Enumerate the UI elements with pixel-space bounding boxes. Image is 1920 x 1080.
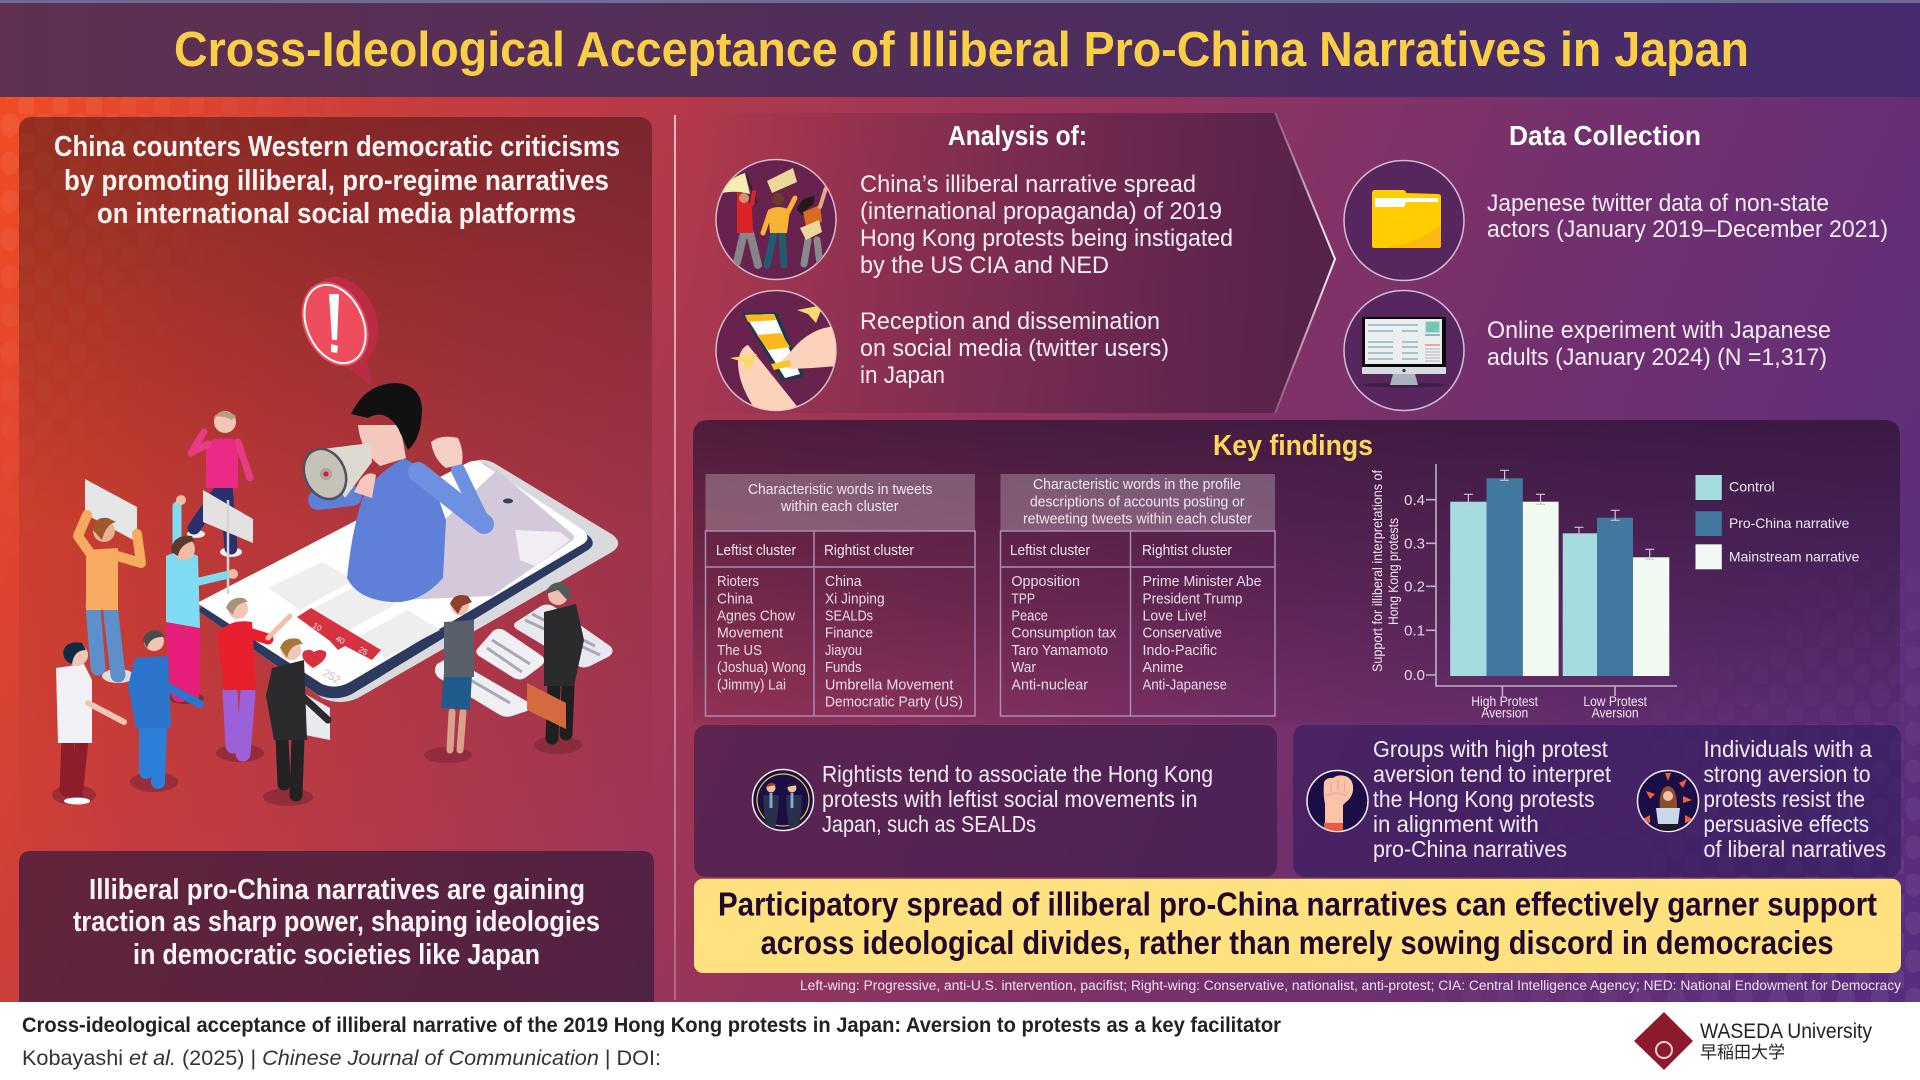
text: analysis item 1: Hong Kong protests being instigated <box>860 225 1233 252</box>
text: analysis item 2: on social media (twitter users) <box>860 335 1169 362</box>
legend: Pro-China narrative <box>1729 515 1850 531</box>
text: analysis item 2: Reception and dissemination <box>860 308 1160 335</box>
callout: main conclusion <box>694 879 1901 973</box>
chart bars <box>1450 478 1669 676</box>
text: rightists: Japan, such as SEALDs <box>822 811 1036 837</box>
footer: citation <box>0 1002 1920 1080</box>
text: individuals: persuasive effects <box>1704 811 1869 837</box>
text: twitter data: actors (January 2019–December 2021) <box>1487 216 1888 243</box>
table: tweet words: Finance <box>825 626 873 642</box>
person: businessman with briefcase <box>527 582 584 754</box>
text: analysis item 1: (international propaganda) of 2019 <box>860 198 1222 225</box>
table: profile words: Prime Minister Abe <box>1142 574 1262 590</box>
table: profile words: Consumption tax <box>1011 626 1117 642</box>
table: profile words: Indo-Pacific <box>1142 643 1217 659</box>
logo: Waseda University: WASEDA University <box>1700 1020 1872 1043</box>
table: profile words: Anti-Japanese <box>1142 678 1227 694</box>
heading: key findings: Key findings <box>1213 430 1373 462</box>
person: white shirt <box>52 642 124 805</box>
table: profile words: descriptions of accounts posting or <box>1030 495 1245 511</box>
y axis labels: 0.3 <box>1404 536 1425 552</box>
table: profile words: TPP <box>1011 591 1035 607</box>
text: groups: aversion tend to interpret <box>1373 761 1611 787</box>
heading: left panel statement: China counters Western democratic criticisms <box>54 131 620 163</box>
panel: bottom-left conclusion: Illiberal pro-China narratives are gaining <box>89 874 585 906</box>
text: groups: pro-China narratives <box>1373 836 1567 862</box>
table: profile words: Anti-nuclear <box>1011 678 1088 694</box>
panel: bottom-left conclusion: in democratic societies like Japan <box>133 939 540 971</box>
smartphone <box>197 460 618 702</box>
protester: orange shirt with sign <box>78 479 141 683</box>
y axis labels: 0.2 <box>1404 578 1425 596</box>
panel: left context <box>19 117 652 857</box>
alert speech bubble <box>289 266 392 386</box>
y axis labels <box>1369 470 1425 684</box>
text: analysis item 2 <box>860 308 1169 389</box>
notification badge: 40 <box>334 634 347 646</box>
text: individuals: of liberal narratives <box>1704 836 1886 862</box>
logo: Waseda University <box>1634 1012 1872 1070</box>
table: profile words: Taro Yamamoto <box>1011 643 1108 659</box>
panel: bottom-left conclusion: traction as sharp power, shaping ideologies <box>73 906 600 938</box>
x axis labels: Low Protest <box>1583 693 1647 709</box>
heading: data collection: Data Collection <box>1509 120 1701 151</box>
table: tweet words: Characteristic words in tweets <box>748 482 932 498</box>
footer: citation: Cross-ideological acceptance of illiberal narrative of the 2019 Hong Kong protests in Japan: Aversion to protests as a key facilitator <box>22 1014 1281 1037</box>
protester: cyan top <box>166 495 238 704</box>
table: profile words: Characteristic words in the profile <box>1033 477 1241 493</box>
text: analysis item 2: in Japan <box>860 362 945 389</box>
text: analysis item 1 <box>860 171 1233 279</box>
x axis labels: Aversion <box>1481 705 1528 721</box>
y axis labels: 0.1 <box>1404 622 1425 640</box>
text: online experiment: adults (January 2024) (N =1,317) <box>1487 344 1827 371</box>
table: tweet words: within each cluster <box>780 499 899 515</box>
text: groups: in alignment with <box>1373 811 1539 837</box>
text: analysis item 1: by the US CIA and NED <box>860 252 1109 279</box>
y axis labels: Hong Kong protests <box>1385 518 1401 625</box>
text: individuals: strong aversion to <box>1704 761 1870 787</box>
icon: two men <box>752 770 814 830</box>
text: rightists: protests with leftist social movements in <box>822 786 1198 812</box>
table: tweet words: The US <box>717 643 762 659</box>
table: profile words: War <box>1011 660 1036 676</box>
text: online experiment <box>1487 317 1831 371</box>
text: groups <box>1373 736 1611 862</box>
illustration: crowd around smartphone with megaphone speaker <box>52 266 618 806</box>
table: tweet words: Democratic Party (US) <box>825 695 963 711</box>
table: tweet words: China <box>717 591 754 607</box>
text: analysis item 1: China’s illiberal narrative spread <box>860 171 1196 198</box>
table: profile words: Leftist cluster <box>1010 543 1090 559</box>
table: profile words: Peace <box>1011 609 1048 625</box>
icon: woman with arrows <box>1638 770 1698 832</box>
notification badge: 25 <box>357 645 370 657</box>
table: profile words: Anime <box>1142 660 1183 676</box>
text: groups: Groups with high protest <box>1373 736 1608 762</box>
heading: left panel statement <box>54 131 620 230</box>
text: individuals: Individuals with a <box>1704 736 1873 762</box>
table: profile words: Opposition <box>1011 574 1080 590</box>
table: tweet words: Agnes Chow <box>717 609 795 625</box>
main figure with megaphone <box>296 383 484 602</box>
table: tweet words: Rightist cluster <box>824 543 914 559</box>
text: groups: the Hong Kong protests <box>1373 786 1594 812</box>
table: profile words: President Trump <box>1142 591 1242 607</box>
notification badge: 252 <box>320 667 342 687</box>
table: tweet words: (Joshua) Wong <box>717 660 806 676</box>
icon: monitor <box>1344 290 1464 410</box>
table: tweet words: Rioters <box>717 574 759 590</box>
title: Cross-Ideological Acceptance of Illiberal Pro-China Narratives in Japan <box>174 23 1749 77</box>
protester: pink top <box>187 411 253 594</box>
table: profile words <box>1000 474 1275 716</box>
icon: raised fist <box>1307 770 1368 832</box>
y axis labels: 0.0 <box>1404 667 1425 684</box>
text: twitter data <box>1487 190 1888 243</box>
legend: Mainstream narrative <box>1729 549 1860 565</box>
panel: key findings <box>693 420 1900 724</box>
x axis labels: High Protest <box>1471 693 1538 709</box>
person: black suit with paper <box>263 638 330 806</box>
panel: bottom-left conclusion <box>19 851 654 1002</box>
notification badge: 10 <box>311 621 324 633</box>
legend <box>1696 475 1860 569</box>
logo: Waseda University: 早稲田大学 <box>1700 1043 1785 1062</box>
heading: analysis: Analysis of: <box>948 120 1087 151</box>
panel: protest aversion findings <box>1293 725 1901 877</box>
table: tweet words: SEALDs <box>825 609 873 625</box>
table: tweet words <box>706 474 975 716</box>
table: profile words: retweeting tweets within each cluster <box>1023 512 1252 528</box>
heading: left panel statement: by promoting illiberal, pro-regime narratives <box>64 165 609 197</box>
panel: data collection <box>1344 120 1888 410</box>
text: individuals: protests resist the <box>1704 786 1865 812</box>
table: tweet words: Umbrella Movement <box>825 678 953 694</box>
notification badge <box>297 608 381 687</box>
table: tweet words: Leftist cluster <box>716 543 796 559</box>
text: rightists: Rightists tend to associate the Hong Kong <box>822 761 1213 787</box>
bar chart <box>1369 464 1677 721</box>
panel: rightists finding <box>694 725 1277 877</box>
icon: folder <box>1344 160 1464 280</box>
table: tweet words: (Jimmy) Lai <box>717 678 786 694</box>
table: tweet words: China <box>825 574 862 590</box>
text: twitter data: Japenese twitter data of non-state <box>1487 190 1829 217</box>
y axis labels: Support for illiberal interpretations of <box>1369 470 1385 672</box>
table: tweet words: Movement <box>717 626 783 642</box>
title banner <box>0 3 1920 97</box>
person: woman in skirt <box>424 595 474 763</box>
panel: analysis chevron <box>690 113 1335 413</box>
table: profile words: Conservative <box>1142 626 1222 642</box>
text: rightists <box>822 761 1213 837</box>
chat cards <box>435 604 613 717</box>
table: profile words: Love Live! <box>1142 609 1207 625</box>
legend: Control <box>1729 479 1775 495</box>
text: individuals <box>1704 736 1886 862</box>
icon: protesters <box>716 160 836 280</box>
heading: left panel statement: on international social media platforms <box>97 198 576 230</box>
table: tweet words: Funds <box>825 660 862 676</box>
icon: hand holding phone <box>716 290 838 412</box>
table: profile words: Rightist cluster <box>1142 543 1232 559</box>
footnote: abbreviations: Left-wing: Progressive, anti-U.S. intervention, pacifist; Right-wing: Conservative, nationalist, anti-protest; CIA: Central Intelligence Agency; NED: National Endowment for Democracy <box>800 978 1901 993</box>
x axis labels: Aversion <box>1592 705 1639 721</box>
table: tweet words: Xi Jinping <box>825 591 885 607</box>
table: tweet words: Jiayou <box>825 643 862 659</box>
text: online experiment: Online experiment with Japanese <box>1487 317 1831 344</box>
y axis labels: 0.4 <box>1404 492 1425 509</box>
footer: citation: Kobayashi et al. (2025) | Chinese Journal of Communication | DOI: <box>22 1047 661 1070</box>
person: red top pointing <box>216 598 290 762</box>
x axis labels <box>1471 693 1647 721</box>
person: blue suit <box>128 630 200 792</box>
